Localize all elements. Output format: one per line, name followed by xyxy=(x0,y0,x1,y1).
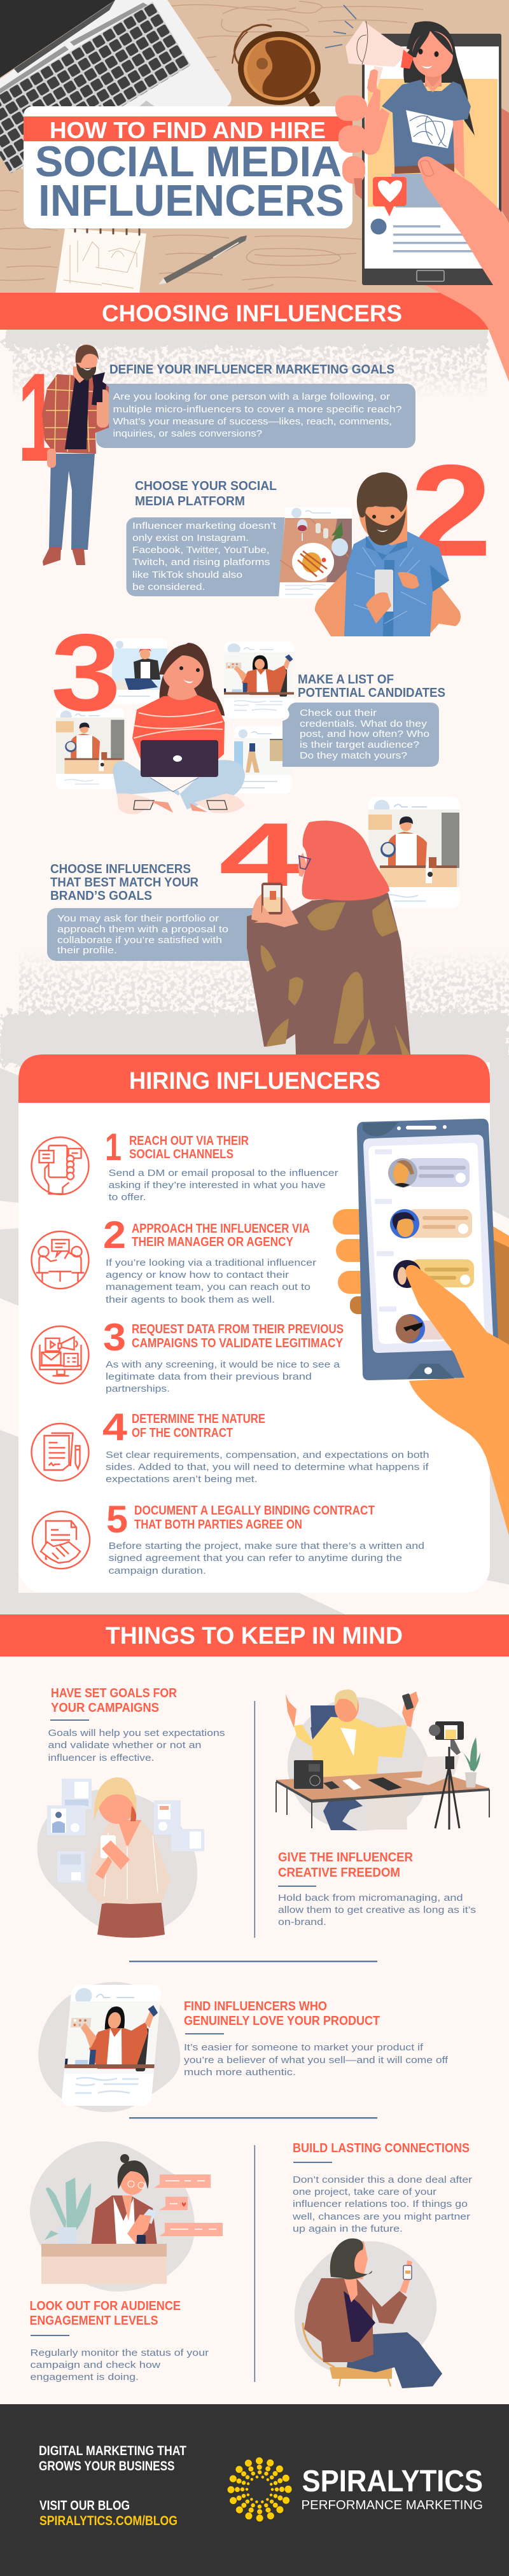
section band: choosing influencers: CHOOSING INFLUENCERS xyxy=(102,300,402,326)
step 3: number: 3 xyxy=(51,612,121,734)
heading: GIVE THE INFLUENCER xyxy=(278,1851,414,1865)
text xyxy=(106,1258,316,1305)
step 2: food post card xyxy=(279,507,355,598)
text: their agents to book them as well. xyxy=(106,1295,275,1305)
heading: DETERMINE THE NATURE xyxy=(132,1412,265,1426)
text xyxy=(106,1450,429,1485)
phone with chat list xyxy=(357,1119,499,1380)
step 1: box: inquiries, or sales conversions? xyxy=(113,429,262,439)
laptop xyxy=(0,0,232,173)
logo wordmark: PERFORMANCE MARKETING xyxy=(302,2498,483,2512)
step 4: box: their profile. xyxy=(57,946,117,956)
text: management team, you can reach out to xyxy=(106,1282,310,1292)
blog link: VISIT OUR BLOG xyxy=(39,2498,130,2513)
text: influencer is effective. xyxy=(48,1753,154,1763)
number 3: 3 xyxy=(103,1316,126,1359)
text: Hold back from micromanaging, and xyxy=(278,1893,463,1903)
step 1: number: 1 xyxy=(18,347,57,487)
section band: things to keep in mind xyxy=(0,1614,509,1656)
icon: handshake xyxy=(32,1511,90,1569)
section band: choosing influencers xyxy=(0,293,509,330)
icon: phone and chat xyxy=(32,1137,89,1194)
footer xyxy=(0,2404,509,2576)
step 4: heading xyxy=(50,862,199,903)
number 1: 1 xyxy=(105,1126,122,1168)
title card: SOCIAL MEDIA xyxy=(35,137,342,186)
text: much more authentic. xyxy=(184,2068,296,2078)
title card xyxy=(24,106,352,228)
text: signed agreement that you can refer to anytime during the xyxy=(108,1553,402,1564)
heading xyxy=(132,1412,265,1440)
illustration: woman with documents xyxy=(38,1777,204,1938)
text: engagement is doing. xyxy=(31,2372,139,2383)
text: Set clear requirements, compensation, and expectations on both xyxy=(106,1450,429,1460)
icon: contract xyxy=(32,1424,89,1481)
text: If you’re looking via a traditional influencer xyxy=(106,1258,316,1268)
step 3: heading xyxy=(298,673,445,700)
text: As with any screening, it would be nice to see a xyxy=(106,1360,340,1370)
heading: OF THE CONTRACT xyxy=(132,1426,233,1440)
heading: THAT BOTH PARTIES AGREE ON xyxy=(134,1518,302,1532)
text: campaign duration. xyxy=(108,1566,206,1576)
hiring item 4 xyxy=(32,1406,429,1485)
step 4: box: collaborate if you’re satisfied with xyxy=(57,935,222,946)
step 2: box: only exist on Instagram. xyxy=(132,533,249,543)
step 4: box: approach them with a proposal to xyxy=(57,925,228,935)
hand thumb over phone xyxy=(405,1265,509,1536)
hiring item 3 xyxy=(32,1316,344,1394)
step 4: post card xyxy=(368,797,459,908)
text: sides. Added to that, you will need to determine what happens if xyxy=(106,1462,429,1473)
heading: FIND INFLUENCERS WHO xyxy=(184,1999,327,2013)
step 1: man with phone xyxy=(42,344,109,566)
hiring item 1 xyxy=(32,1126,338,1203)
heading: ENGAGEMENT LEVELS xyxy=(29,2314,158,2328)
heading xyxy=(184,1999,380,2028)
number 5: 5 xyxy=(106,1498,128,1541)
logo wordmark: SPIRALYTICS xyxy=(302,2465,483,2498)
text xyxy=(108,1541,424,1576)
step 2: bearded man xyxy=(315,472,461,636)
text: Don’t consider this a done deal after xyxy=(293,2175,472,2185)
heading: APPROACH THE INFLUENCER VIA xyxy=(132,1222,310,1236)
step 2: box: Twitch, and rising platforms xyxy=(132,557,270,568)
text: you’re a believer of what you sell—and it will come off xyxy=(184,2055,449,2066)
section band: things to keep in mind: THINGS TO KEEP IN MIND xyxy=(106,1623,403,1649)
step 1: heading: DEFINE YOUR INFLUENCER MARKETING GOALS xyxy=(109,363,394,377)
text: Regularly monitor the status of your xyxy=(31,2348,209,2358)
heading: REQUEST DATA FROM THEIR PREVIOUS xyxy=(132,1322,344,1336)
step 1: box xyxy=(96,384,415,448)
speech bubbles xyxy=(154,2174,223,2236)
step 1: box: multiple micro-influencers to cover a more specific reach? xyxy=(113,405,402,415)
text xyxy=(292,2175,472,2234)
hand holding phone xyxy=(335,95,509,382)
heading xyxy=(129,1134,249,1161)
notebook xyxy=(55,228,146,294)
step 3: post cards xyxy=(56,638,294,794)
tip: have set goals xyxy=(38,1686,225,1938)
pen xyxy=(158,235,247,284)
panel: hiring influencers xyxy=(18,1054,509,1593)
vertical divider bottom xyxy=(254,2145,255,2382)
heading: CAMPAIGNS TO VALIDATE LEGITIMACY xyxy=(132,1336,344,1350)
step 2: box: Facebook, Twitter, YouTube, xyxy=(132,545,270,556)
step 3: heading: MAKE A LIST OF xyxy=(298,673,394,687)
step 2: heading xyxy=(135,479,277,508)
footer tagline: GROWS YOUR BUSINESS xyxy=(39,2459,174,2474)
text: up again in the future. xyxy=(293,2224,403,2234)
heading: GENUINELY LOVE YOUR PRODUCT xyxy=(184,2014,380,2028)
text: allow them to get creative as long as it’s xyxy=(278,1905,476,1915)
text: well, chances are you might partner xyxy=(292,2212,470,2222)
text: It’s easier for someone to market your product if xyxy=(184,2043,424,2053)
text xyxy=(31,2348,209,2383)
splatter backdrop bottom xyxy=(0,948,509,1066)
step 3: box: is their target audience? xyxy=(300,740,419,750)
step 3: box: Do they match yours? xyxy=(300,751,407,761)
step 2: heading: CHOOSE YOUR SOCIAL xyxy=(135,479,277,493)
heading xyxy=(134,1504,375,1532)
footer tagline xyxy=(39,2444,186,2474)
step 2: heading: MEDIA PLATFORM xyxy=(135,494,245,508)
vertical divider top xyxy=(254,1701,255,1938)
heading: LOOK OUT FOR AUDIENCE xyxy=(29,2299,181,2313)
camera on tripod xyxy=(429,1721,464,1830)
step 4: number: 4 xyxy=(219,804,302,906)
step 4: woman from behind xyxy=(247,820,410,1054)
heading xyxy=(132,1322,344,1350)
heading xyxy=(29,2299,181,2328)
heading: BUILD LASTING CONNECTIONS xyxy=(293,2141,470,2155)
influencer figure xyxy=(363,21,475,207)
step 2: box: like TikTok should also xyxy=(132,570,242,580)
number 4: 4 xyxy=(102,1406,128,1448)
chat rows xyxy=(375,1149,474,1343)
heading xyxy=(278,1851,414,1880)
text: partnerships. xyxy=(106,1384,170,1394)
like bubble xyxy=(373,177,407,216)
text xyxy=(108,1168,338,1203)
text: campaign and check how xyxy=(31,2360,161,2370)
step 1: box: Are you looking for one person with a large following, or xyxy=(113,392,390,402)
step 2: box: be considered. xyxy=(132,582,205,592)
step 3: box: credentials. What do they xyxy=(300,719,428,729)
heading xyxy=(51,1686,177,1715)
text: and validate whether or not an xyxy=(48,1740,201,1751)
title card: INFLUENCERS xyxy=(38,176,344,225)
hero: desk scene xyxy=(0,0,509,294)
text xyxy=(106,1360,340,1394)
step 3: woman with laptop xyxy=(113,643,245,814)
logo wordmark xyxy=(302,2465,483,2512)
title card: HOW TO FIND AND HIRE xyxy=(50,117,326,143)
heading: hiring influencers: HIRING INFLUENCERS xyxy=(129,1068,380,1095)
text: Send a DM or email proposal to the influencer xyxy=(108,1168,338,1179)
icon: campaign screen xyxy=(32,1326,89,1383)
illustration: man at desk xyxy=(276,1690,489,1831)
illustration: woman at desk xyxy=(30,2141,223,2292)
hand behind phone xyxy=(333,1209,509,1346)
text xyxy=(184,2043,449,2078)
step 4: heading: CHOOSE INFLUENCERS xyxy=(50,862,191,876)
megaphone rays xyxy=(325,5,356,48)
heading: SOCIAL CHANNELS xyxy=(129,1147,234,1161)
text: to offer. xyxy=(108,1193,146,1203)
text: agency or know how to contact their xyxy=(106,1270,289,1280)
step 2: box xyxy=(126,517,293,596)
step 4: heading: BRAND’S GOALS xyxy=(50,889,152,903)
splatter backdrop top xyxy=(5,321,489,399)
backdrop shapes behind hiring panel xyxy=(0,1054,509,1614)
logo mark xyxy=(231,2461,288,2518)
tip: genuinely love your product xyxy=(38,1982,449,2112)
illustration: post card on blob xyxy=(38,1982,180,2112)
heading: THEIR MANAGER OR AGENCY xyxy=(132,1235,294,1249)
hiring item 5 xyxy=(32,1498,424,1576)
step 1: box: What’s your measure of success—likes, reach, comments, xyxy=(113,417,392,427)
plant xyxy=(461,1737,480,1788)
heading: REACH OUT VIA THEIR xyxy=(129,1134,249,1148)
coffee cup xyxy=(232,25,321,108)
step 2: box: Influencer marketing doesn’t xyxy=(132,521,276,531)
step 4: box: You may ask for their portfolio or xyxy=(57,914,219,924)
number 2: 2 xyxy=(103,1214,126,1256)
post text lines xyxy=(370,219,479,252)
heading: DOCUMENT A LEGALLY BINDING CONTRACT xyxy=(134,1504,375,1518)
heading xyxy=(132,1222,310,1249)
text: influencer relations too. If things go xyxy=(293,2199,468,2209)
step 4: box xyxy=(47,908,263,961)
blog link xyxy=(39,2498,178,2528)
blog link: SPIRALYTICS.COM/BLOG xyxy=(39,2514,178,2528)
hiring item 2 xyxy=(32,1214,316,1305)
step 3: box: post, and how often? Who xyxy=(300,729,429,739)
text: on-brand. xyxy=(278,1917,326,1928)
megaphone xyxy=(345,21,414,92)
step 3: box: Check out their xyxy=(300,708,377,718)
step 4: heading: THAT BEST MATCH YOUR xyxy=(50,876,199,890)
text: one project, take care of your xyxy=(293,2187,436,2197)
text xyxy=(278,1893,476,1928)
step 2: number: 2 xyxy=(410,438,492,584)
text: expectations aren’t being met. xyxy=(106,1474,258,1485)
text: Goals will help you set expectations xyxy=(48,1728,225,1739)
tip: lasting connections xyxy=(292,2141,472,2388)
step 3: heading: POTENTIAL CANDIDATES xyxy=(298,686,445,700)
text: legitimate data from their previous brand xyxy=(106,1372,312,1382)
step 3: box xyxy=(282,703,439,767)
smartphone with influencer xyxy=(345,21,509,285)
text xyxy=(48,1728,225,1763)
icon: meeting xyxy=(32,1231,89,1289)
text: Before starting the project, make sure that there’s a written and xyxy=(108,1541,424,1551)
text: asking if they’re interested in what you have xyxy=(108,1180,326,1191)
heading: CREATIVE FREEDOM xyxy=(278,1866,400,1880)
tip: audience engagement xyxy=(29,2141,223,2383)
illustration: seated woman xyxy=(295,2239,442,2388)
footer tagline: DIGITAL MARKETING THAT xyxy=(39,2444,186,2458)
tip: creative freedom xyxy=(276,1690,489,1928)
heading: YOUR CAMPAIGNS xyxy=(51,1701,159,1715)
heading: HAVE SET GOALS FOR xyxy=(51,1686,177,1700)
